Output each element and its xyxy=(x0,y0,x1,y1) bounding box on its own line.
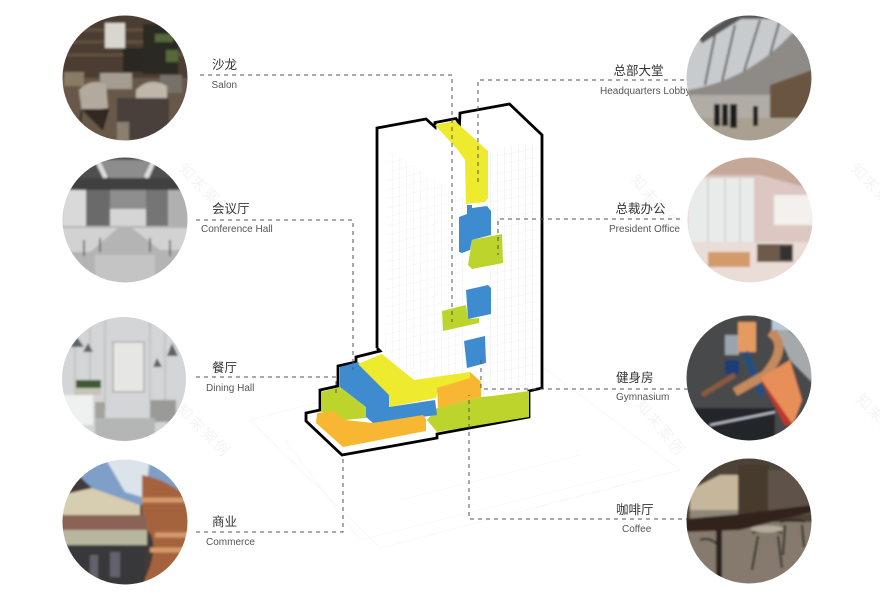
label: president office xyxy=(609,201,680,235)
tower outline stroke xyxy=(306,104,542,455)
label: salon xyxy=(212,58,237,91)
label: commerce xyxy=(206,514,255,548)
photo: commerce xyxy=(60,458,190,588)
leader: president office xyxy=(498,219,680,255)
leader lines xyxy=(196,75,692,532)
label: gymnasium xyxy=(616,370,669,403)
block: right podium green xyxy=(427,391,529,432)
leader: coffee xyxy=(469,395,690,519)
leader: gymnasium xyxy=(481,358,688,389)
label: headquarters lobby: 总部大堂 xyxy=(614,63,664,78)
tower facade grid left xyxy=(385,150,466,380)
photo: salon xyxy=(62,16,188,140)
block: left podium green xyxy=(321,387,366,420)
label: conference hall xyxy=(201,202,273,235)
leader: salon xyxy=(200,75,452,322)
leader: commerce xyxy=(196,455,343,532)
label: coffee: Coffee xyxy=(622,524,652,535)
block: middle blue xyxy=(466,285,491,319)
label: coffee: 咖啡厅 xyxy=(616,502,654,517)
photo: conference hall xyxy=(60,155,190,286)
watermarks: 知末案例 xyxy=(173,400,234,461)
label: president office: President Office xyxy=(609,224,680,235)
leader: conference hall xyxy=(196,220,353,370)
watermarks: 知末案例 xyxy=(175,160,236,221)
block: podium blue xyxy=(340,362,437,423)
site plan faint lines xyxy=(250,350,680,548)
label: commerce: 商业 xyxy=(212,514,237,529)
watermarks: 知末案例 xyxy=(627,171,684,235)
label: gymnasium: 健身房 xyxy=(616,370,654,385)
watermarks: 知末案例 xyxy=(632,396,689,460)
block: podium right orange xyxy=(437,372,481,408)
leader: headquarters lobby xyxy=(478,80,692,185)
tower outline and white mass xyxy=(306,104,542,455)
leader: dining hall xyxy=(196,377,336,397)
block: podium yellow xyxy=(358,354,481,407)
label: coffee xyxy=(616,502,654,535)
label: commerce: Commerce xyxy=(206,537,255,548)
photo: gymnasium xyxy=(685,312,815,443)
block: left orange xyxy=(316,411,426,447)
label: salon: Salon xyxy=(212,80,237,91)
photo: president office xyxy=(685,155,815,287)
label: dining hall: 餐厅 xyxy=(212,360,237,375)
watermarks xyxy=(173,159,880,461)
block: upper green xyxy=(468,234,503,269)
label: headquarters lobby xyxy=(600,63,691,97)
block: upper yellow xyxy=(435,121,488,204)
tower facade grid right xyxy=(482,140,538,396)
block: middle green xyxy=(442,305,479,331)
block: lower blue xyxy=(464,336,486,368)
photo: dining hall xyxy=(60,315,190,445)
photo: headquarters lobby xyxy=(686,16,812,140)
block: upper blue xyxy=(459,205,491,253)
label: president office: 总裁办公 xyxy=(616,201,666,216)
label: gymnasium: Gymnasium xyxy=(616,392,669,403)
watermarks: 知末案例 xyxy=(397,159,453,224)
photo: coffee xyxy=(686,458,812,584)
tower building xyxy=(306,104,542,455)
label: dining hall xyxy=(206,360,254,394)
label: headquarters lobby: Headquarters Lobby xyxy=(600,86,691,97)
label: dining hall: Dining Hall xyxy=(206,383,254,394)
label: salon: 沙龙 xyxy=(212,58,237,72)
label: conference hall: 会议厅 xyxy=(212,202,250,216)
label: conference hall: Conference Hall xyxy=(201,224,273,235)
